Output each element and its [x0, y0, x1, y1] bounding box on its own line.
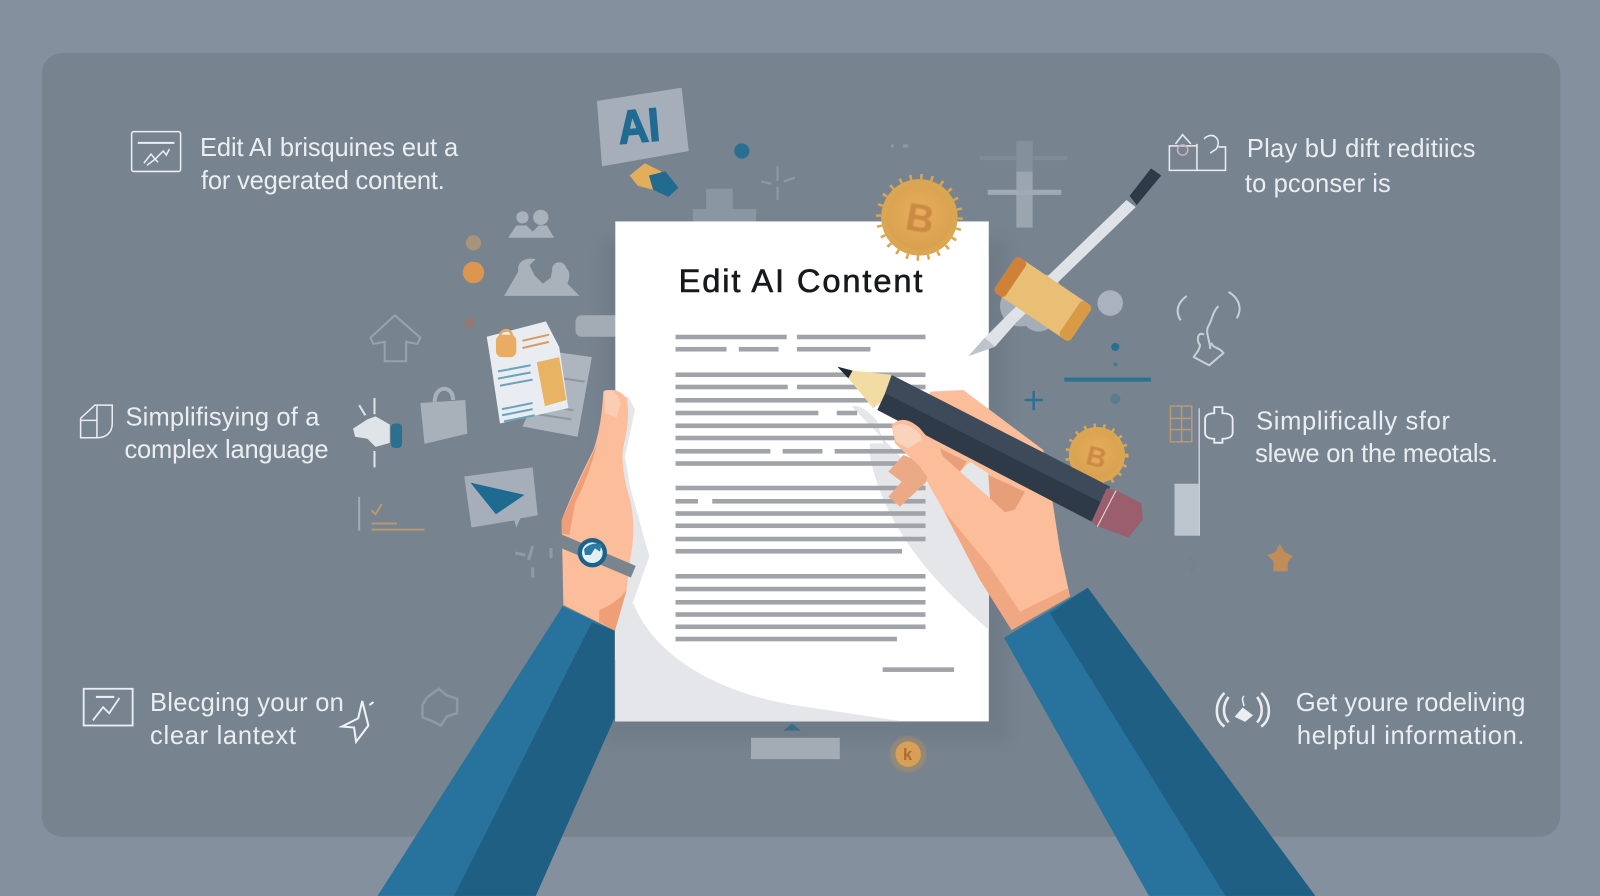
side shadow	[562, 443, 597, 535]
icon: faint red dot	[464, 317, 474, 328]
icon: two figures	[504, 259, 580, 296]
wrist shadow	[599, 590, 627, 631]
left hand holding paper	[558, 390, 633, 631]
web shadow	[988, 475, 1025, 512]
text: top left: Edit AI brisquines eut a	[200, 134, 459, 162]
left sleeve	[378, 606, 614, 896]
watch strap	[558, 540, 633, 572]
icon: AI card: AI	[616, 98, 662, 154]
icon: open book	[1169, 135, 1226, 170]
paper curl shading	[615, 604, 903, 721]
icon: small top dots	[891, 144, 908, 147]
pencil	[837, 367, 1143, 537]
callout: top right	[1169, 135, 1475, 198]
icon: people	[508, 210, 554, 238]
icon: blue dots	[1110, 343, 1120, 404]
icon: small coin	[890, 736, 927, 772]
icon: orange grid	[1170, 406, 1192, 442]
palm	[917, 390, 1070, 630]
icon: faint cross right	[980, 141, 1067, 228]
icon: cloud outline	[422, 689, 457, 726]
callout: middle left	[81, 404, 329, 464]
icon: chart box	[132, 132, 181, 171]
left hand paper shadow	[615, 397, 660, 660]
text: bottom left: Blecging your on	[150, 689, 344, 717]
icon: rounded plug	[1205, 407, 1233, 443]
callout: top left: for vegerated content.	[201, 167, 445, 195]
callout: bottom right: helpful information.	[1297, 722, 1524, 750]
thumb nail	[604, 390, 621, 417]
icon: orange dot	[463, 262, 484, 283]
icon: lower gold coin: B	[1083, 439, 1110, 474]
icon: brain outline	[1178, 292, 1240, 365]
callout: bottom left: clear lantext	[150, 722, 296, 750]
icon: faint ring	[1190, 558, 1194, 571]
icon: folded square	[81, 405, 112, 438]
icon: bottom grey bar	[751, 723, 840, 759]
lower edge shadow	[943, 510, 1070, 630]
icon: bag	[420, 389, 467, 444]
gap between thumb and palm	[960, 462, 990, 498]
icon: laurel	[1217, 693, 1269, 727]
callout: top left	[132, 132, 459, 195]
text: middle right: Simplifically sfor	[1256, 408, 1450, 436]
text: top right: Play bU dift reditiics	[1247, 135, 1475, 163]
icon: blue line	[1064, 378, 1151, 382]
text: middle left: Simplifisying of a	[126, 404, 320, 432]
icon: tan dot	[466, 235, 481, 251]
icon: AI card	[597, 88, 689, 197]
right hand holding pencil	[837, 367, 1143, 630]
icon: long brush with wooden block	[968, 168, 1161, 356]
document title: Edit AI Content	[679, 262, 922, 299]
thumb	[892, 420, 960, 517]
callout: middle left: complex language	[124, 436, 329, 464]
icon: faint sparkle lower	[515, 546, 551, 578]
right sleeve	[1004, 588, 1315, 896]
icon: blue dot	[734, 143, 749, 159]
icon: pointing hand	[353, 398, 402, 467]
text: bottom right: Get youre rodeliving	[1296, 689, 1525, 717]
icon: triangle card	[464, 467, 538, 528]
callout: middle right: slewe on the meotals.	[1255, 440, 1498, 468]
vertical rule and grey bar	[1174, 408, 1200, 536]
callout: bottom left	[84, 689, 344, 750]
icon: grey circle	[1097, 290, 1123, 316]
fingers	[888, 455, 928, 507]
icon: orange star	[1267, 544, 1293, 571]
icon: blue plus	[1024, 391, 1043, 410]
icon: star outline	[342, 701, 373, 742]
icon: top gold coin: B	[902, 196, 937, 243]
callout: top right: to pconser is	[1245, 170, 1391, 198]
thumb nail	[893, 424, 922, 448]
icon: faint cross behind paper	[693, 189, 756, 224]
right hand paper shadow	[852, 406, 989, 630]
watch face	[578, 538, 607, 567]
hand shape	[562, 390, 633, 631]
paper shadow	[604, 240, 1008, 742]
icon: grey pill	[576, 315, 627, 337]
callout: bottom right	[1217, 689, 1525, 750]
icon: chart with check	[359, 497, 424, 531]
icon: faint sparkle	[761, 166, 795, 200]
icon: top gold coin	[879, 177, 960, 258]
icon: up arrow outline	[370, 315, 420, 361]
icon: chart box	[84, 689, 133, 726]
icon: lower gold coin	[1067, 426, 1127, 485]
document sheet	[615, 221, 989, 721]
icon: documents	[487, 321, 592, 437]
icon: small coin: k	[903, 746, 913, 764]
document text lines	[676, 335, 954, 672]
callout: middle right	[1170, 406, 1498, 536]
